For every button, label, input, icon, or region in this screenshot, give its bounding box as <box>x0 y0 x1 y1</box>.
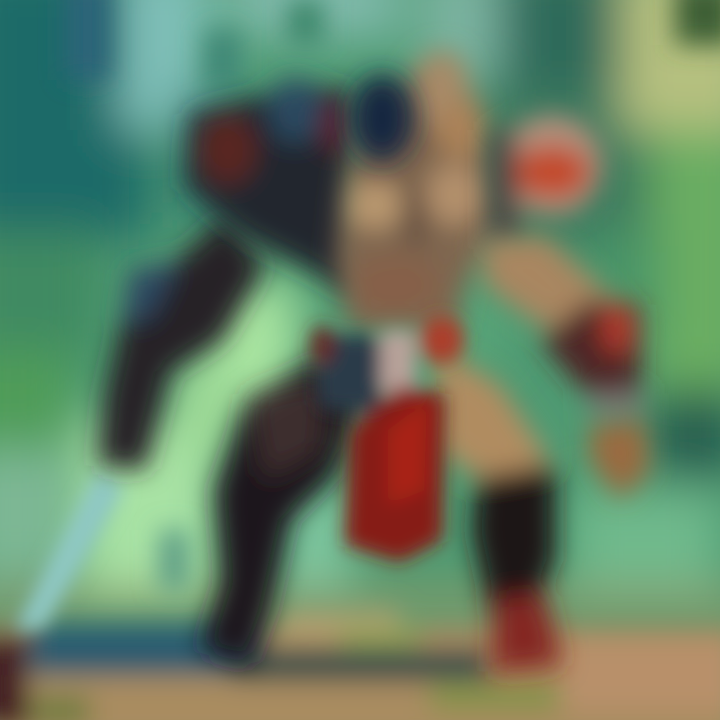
right pauldron <box>490 115 602 250</box>
torso <box>335 50 500 330</box>
spear shaft <box>14 470 124 630</box>
left arm <box>98 215 265 470</box>
legs <box>200 345 562 672</box>
upper body armor <box>185 78 360 300</box>
ground <box>0 610 720 720</box>
belt and loincloth <box>310 316 464 562</box>
character: warrior figure <box>14 50 650 672</box>
right arm <box>480 235 650 500</box>
head <box>350 74 414 162</box>
